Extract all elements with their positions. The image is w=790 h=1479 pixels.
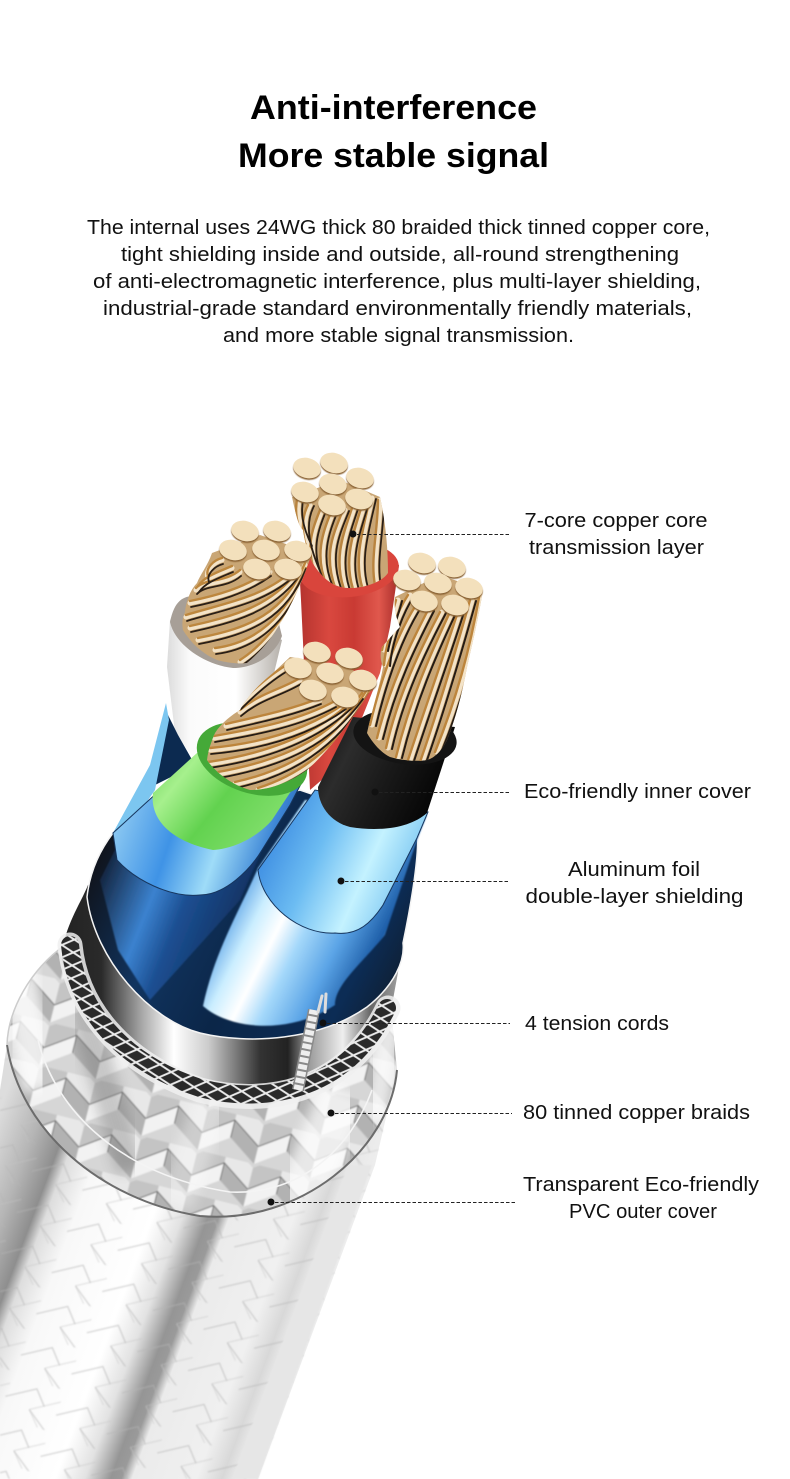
description text block	[87, 217, 710, 347]
tension cord	[298, 994, 326, 1090]
metal shielding band	[62, 850, 403, 1101]
copper strands: red wire	[290, 452, 388, 588]
title: Anti-interference	[250, 89, 537, 127]
green wire	[153, 709, 317, 850]
left foil tube	[100, 840, 262, 1000]
illustration: cable cross-section	[0, 450, 490, 1479]
callout: 7-core copper core: 7-core copper core	[524, 510, 708, 532]
callout: tension cords	[320, 1013, 669, 1035]
red wire	[296, 538, 402, 790]
description text block: The internal uses 24WG thick 80 braided thick tinned copper core,	[87, 217, 710, 239]
outer PVC cover with braid	[0, 930, 420, 1479]
callout: aluminum foil: Aluminum foil	[568, 859, 700, 881]
white wire	[167, 596, 282, 760]
callout: PVC outer cover: Transparent Eco-friendly	[523, 1174, 759, 1196]
callout: inner cover	[372, 781, 751, 803]
callout: tension cords: 4 tension cords	[525, 1013, 669, 1035]
description text block: tight shielding inside and outside, all-round strengthening	[121, 244, 679, 266]
callout: aluminum foil	[338, 859, 744, 908]
shield cavity	[87, 790, 418, 1039]
foil sleeve behind white wire	[113, 703, 195, 838]
green foil sleeve	[113, 780, 303, 895]
callout: 7-core copper core	[350, 510, 708, 559]
right foil tube	[203, 800, 427, 1026]
callout: inner cover: Eco-friendly inner cover	[524, 781, 751, 803]
callout: PVC outer cover: PVC outer cover	[569, 1201, 717, 1223]
callout: PVC outer cover	[268, 1174, 759, 1223]
copper braid mesh	[70, 945, 388, 1096]
description text block: industrial-grade standard environmentally friendly materials,	[103, 298, 692, 320]
copper strands: white wire	[182, 520, 312, 664]
description text block: of anti-electromagnetic interference, plus multi-layer shielding,	[93, 271, 701, 293]
title	[238, 89, 549, 175]
black foil sleeve	[258, 790, 428, 933]
callout: 7-core copper core: transmission layer	[529, 537, 704, 559]
black wire	[318, 703, 460, 829]
copper strands: black wire	[367, 552, 484, 761]
title: More stable signal	[238, 137, 549, 175]
description text block: and more stable signal transmission.	[223, 325, 574, 347]
callout: aluminum foil: double-layer shielding	[526, 886, 744, 908]
callout: copper braids	[328, 1102, 750, 1124]
copper strands: green wire	[200, 639, 380, 795]
callout: copper braids: 80 tinned copper braids	[523, 1102, 750, 1124]
